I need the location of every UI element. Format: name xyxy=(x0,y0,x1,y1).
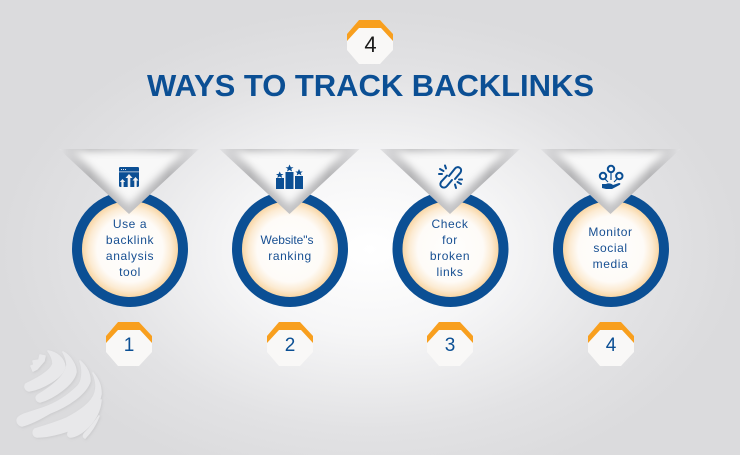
step text: Use a xyxy=(113,217,147,231)
number badge 2 xyxy=(267,322,313,366)
icon: globe watermark xyxy=(17,351,101,438)
number 4: 4 xyxy=(364,32,377,57)
panel: step 3 xyxy=(380,149,520,302)
step text: media xyxy=(593,257,628,271)
icon: broken link xyxy=(439,166,462,188)
number badge 3 xyxy=(427,322,473,366)
panel: step 1 xyxy=(59,149,199,302)
step text: tool xyxy=(119,265,141,279)
number badge 4 xyxy=(588,322,634,366)
number badge 3: 3 xyxy=(445,335,455,356)
step text: Website"s xyxy=(261,233,314,247)
step text: Monitor xyxy=(588,225,633,239)
step text: Check xyxy=(431,217,469,231)
number badge 1: 1 xyxy=(124,335,134,356)
icon: social hand xyxy=(600,166,622,189)
step text: links xyxy=(436,265,464,279)
step text: for xyxy=(442,233,458,247)
step text: social xyxy=(593,241,628,255)
panel: step 2 xyxy=(220,149,360,302)
step text: backlink xyxy=(106,233,154,247)
title: WAYS TO TRACK BACKLINKS xyxy=(147,68,594,103)
number badge 4: 4 xyxy=(606,335,617,356)
number badge 2: 2 xyxy=(285,335,295,356)
step text: broken xyxy=(430,249,470,263)
icon: ranking podium xyxy=(276,164,303,189)
step text: analysis xyxy=(106,249,154,263)
step text: ranking xyxy=(268,249,312,263)
panel: step 4 xyxy=(540,149,680,302)
icon: analysis tool xyxy=(119,167,139,187)
number badge 1 xyxy=(106,322,152,366)
icon: top number badge xyxy=(347,20,393,64)
